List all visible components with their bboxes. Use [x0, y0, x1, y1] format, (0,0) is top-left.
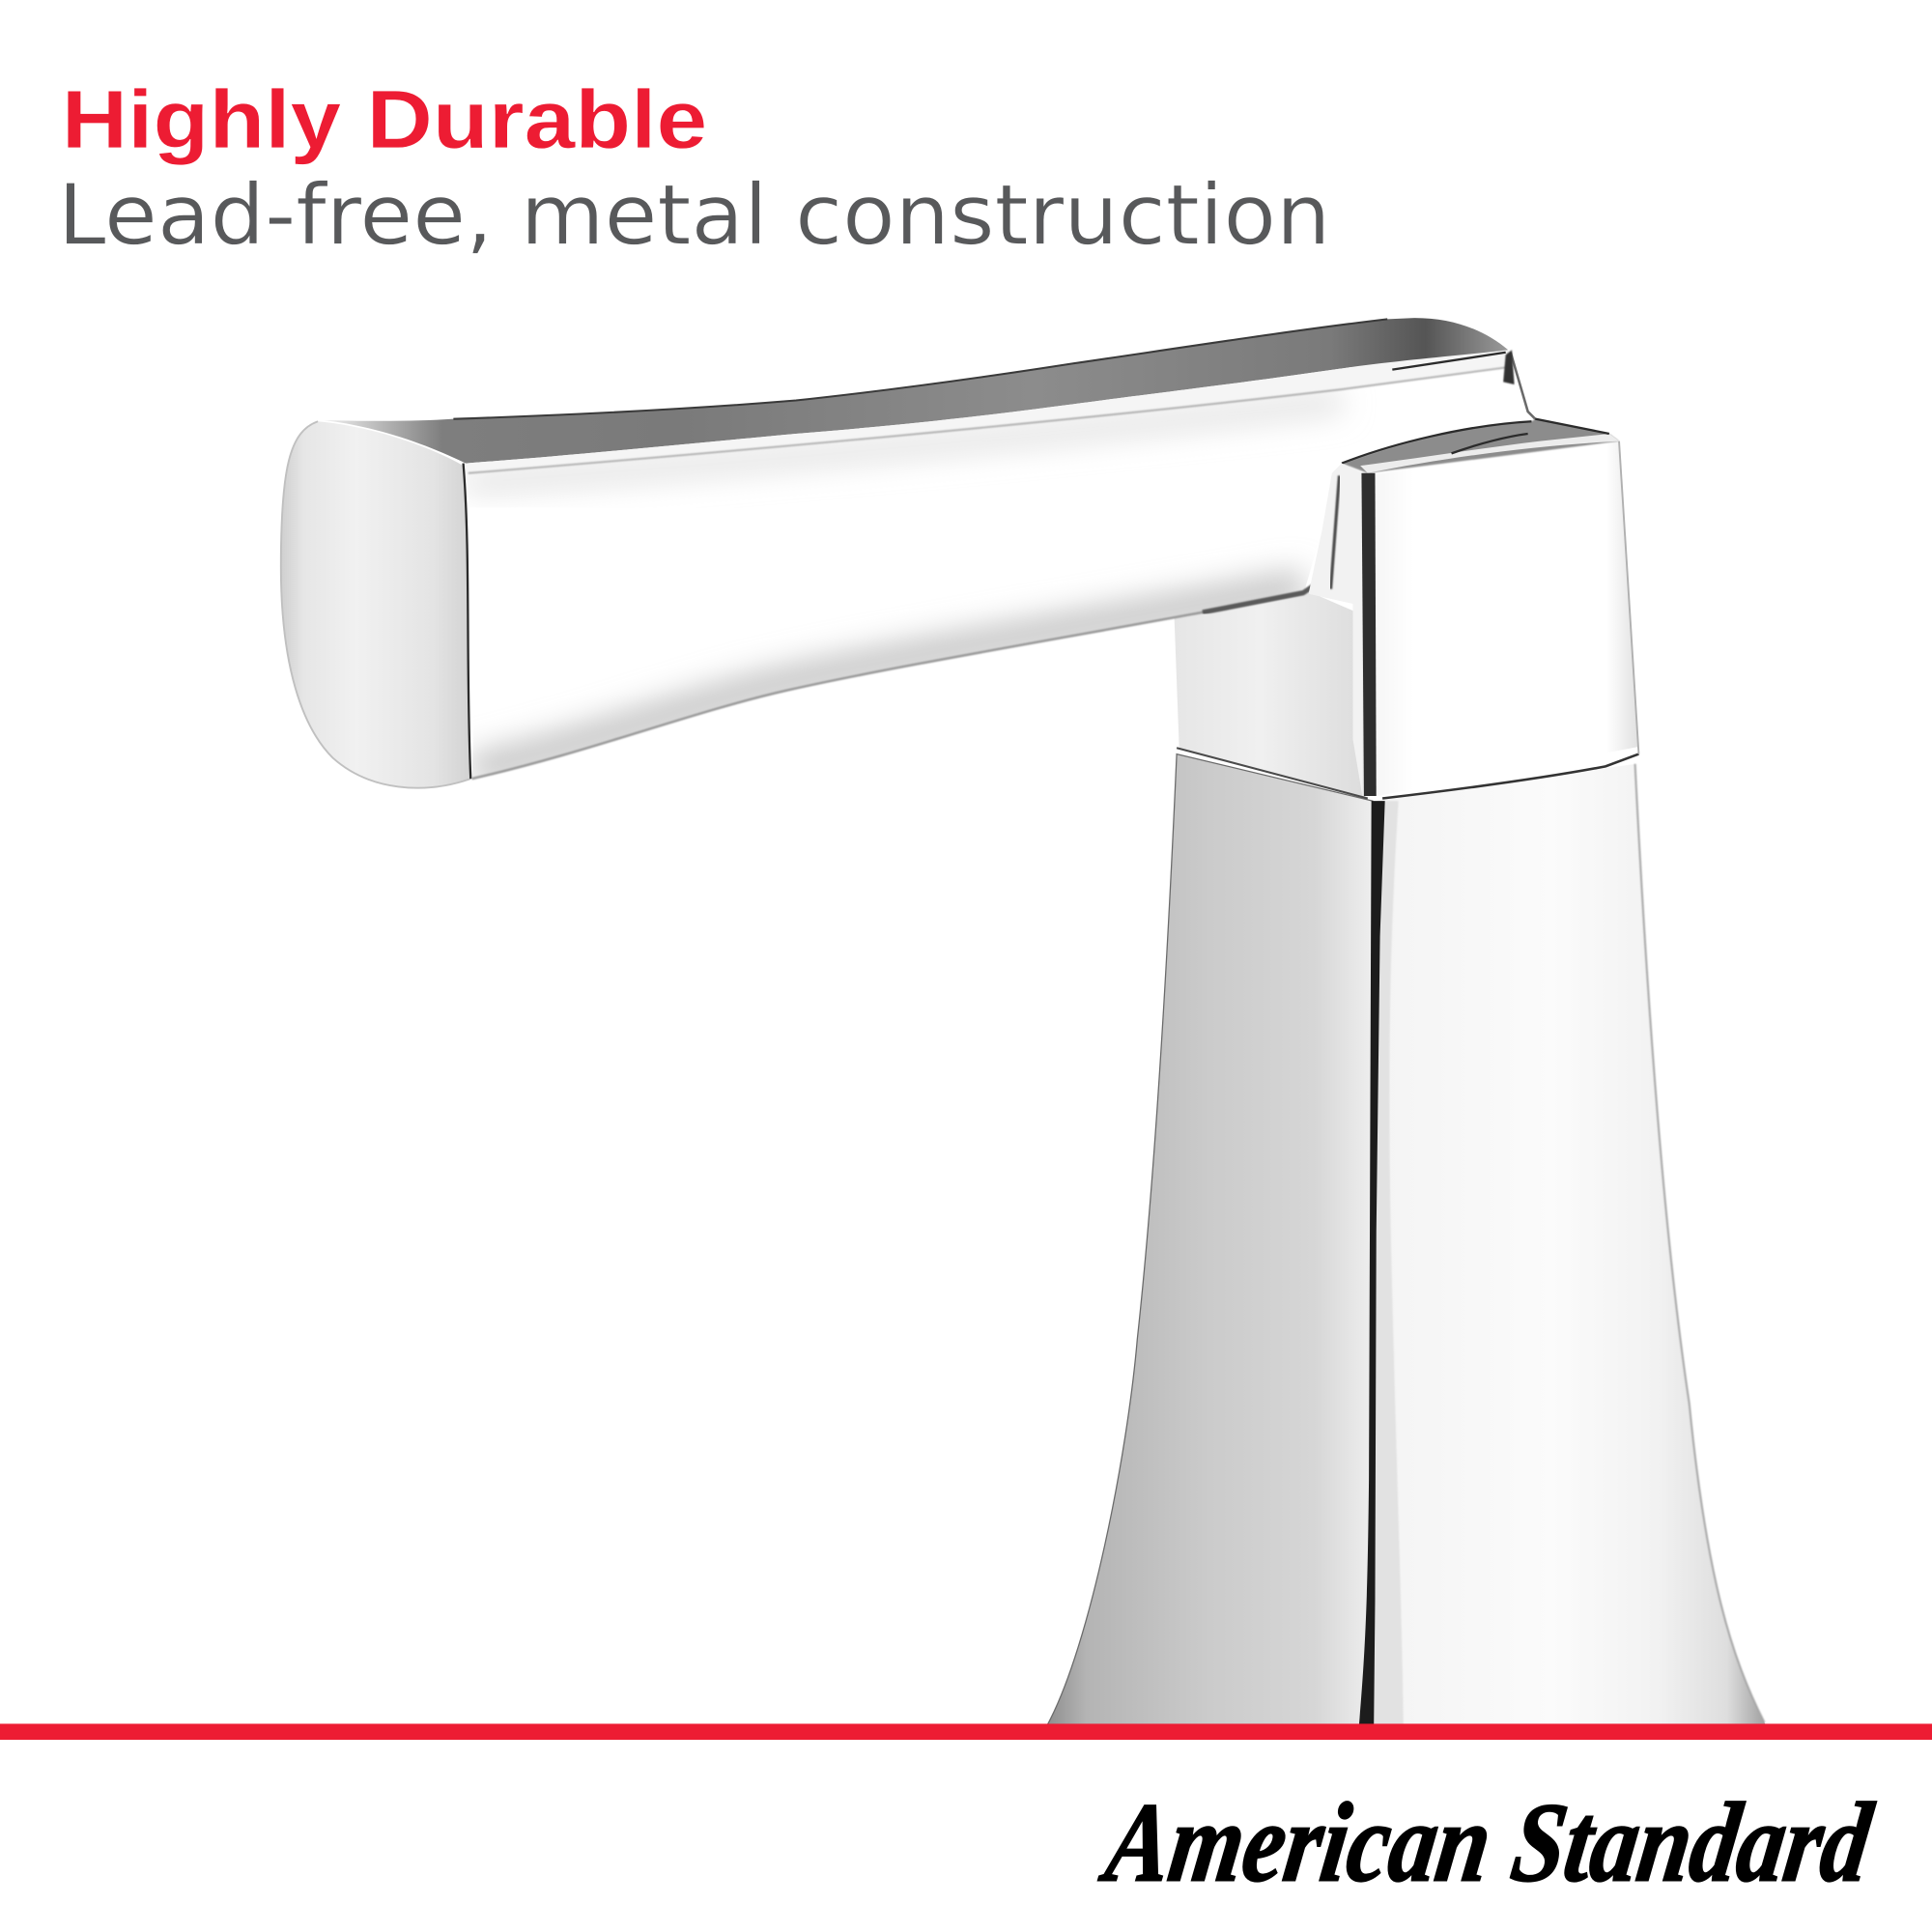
faucet photo: chrome handle and body	[281, 318, 1766, 1725]
subheading: Lead-free, metal construction: Lead-free, metal construction	[58, 167, 1331, 265]
handle block: dark strokes	[1342, 353, 1609, 464]
end cap outline	[281, 421, 470, 788]
handle block: dark vertical edge	[1361, 473, 1377, 796]
handle lower edge shadow	[472, 594, 1303, 779]
right block outer edge	[1619, 441, 1638, 754]
handle main face	[466, 367, 1535, 779]
handle main face shading	[466, 402, 1342, 770]
red divider bar	[0, 1723, 1932, 1740]
lever end outline	[1511, 353, 1538, 421]
faucet neck under handle	[1175, 591, 1365, 799]
faucet body: left face	[1047, 754, 1373, 1725]
handle block: vertical chrome strip	[1309, 464, 1363, 799]
handle block: left seam	[1177, 748, 1368, 799]
handle block: right seam	[1382, 754, 1638, 799]
faucet body: soft strip beside centre edge	[1370, 801, 1404, 1725]
handle top corner dark detail	[1503, 350, 1515, 384]
faucet body: dark centre edge	[1359, 801, 1385, 1725]
highlight band lower line	[469, 367, 1508, 473]
handle end cap	[281, 421, 470, 788]
handle block: top groove	[1342, 419, 1619, 473]
handle block: front right face	[1374, 441, 1638, 796]
handle top highlight band	[466, 350, 1511, 473]
end cap edge line	[464, 464, 470, 779]
handle-neck junction dark	[1203, 584, 1316, 612]
handle top dark rim	[453, 319, 1387, 419]
handle block: chrome streak	[1331, 475, 1339, 589]
handle block: top highlight	[1360, 434, 1619, 473]
faucet body: right outline	[1635, 764, 1765, 1722]
handle top face	[324, 318, 1508, 464]
heading: Highly Durable: Highly Durable	[62, 74, 707, 166]
faucet body: right face	[1378, 764, 1766, 1725]
